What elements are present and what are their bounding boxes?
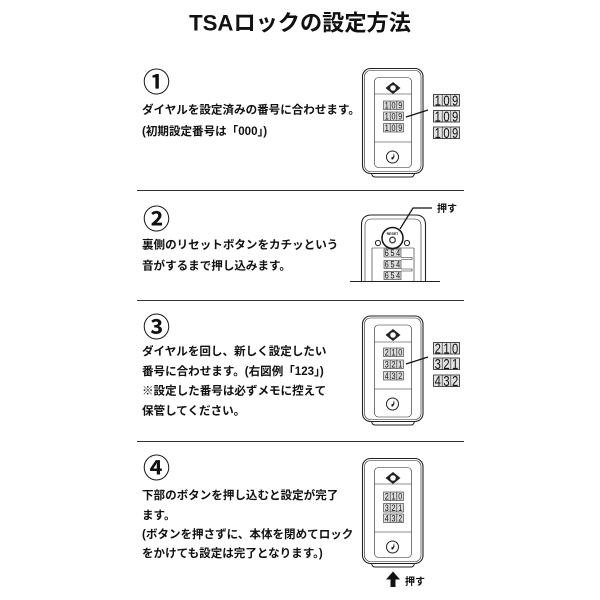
lock illustration 1: 109 [385,112,403,122]
lock illustration 3: 210 [385,348,403,358]
step number 4: ④ [143,454,170,484]
enlarged dials 3 [434,340,460,389]
lock illustration 3 [362,316,423,425]
divider lines [137,190,464,442]
step 3 text: ダイヤルを回し、新しく設定したい [142,344,326,358]
lock illustration 1: 109 [385,123,403,133]
step 4 text: 下部のボタンを押し込むと設定が完了 [142,488,338,502]
step 1 [142,68,460,177]
step 3 text: 番号に合わせます。(右図例「123」) [142,364,324,378]
lock illustration 3: 432 [385,371,403,381]
lock back illustration: 654 [385,260,401,270]
enlarged dials 1: 109 [435,108,458,125]
step 3 text: ※設定した番号は必ずメモに控えて [142,384,326,398]
step 4 [142,454,425,588]
step number 1: ① [143,68,170,98]
step 2 text: 裏側のリセットボタンをカチッという [142,238,338,252]
lock back illustration: RESET [387,232,399,236]
lock illustration 3: 321 [385,360,403,370]
arrow: push up [386,572,400,587]
step 2 text: 音がするまで押し込みます。 [142,258,291,272]
lock illustration 4: 210 [385,492,403,502]
enlarged dials 3: 210 [435,340,458,357]
lock back illustration: 654 [385,248,401,258]
step 4 text: をかけても設定は完了となります。) [142,546,323,560]
step 3 [142,313,460,425]
leader line 3 [406,357,428,364]
lock illustration 1: 109 [385,101,403,111]
title: TSAロックの設定方法 [189,10,411,36]
lock illustration 4: 432 [385,514,403,524]
enlarged dials 1: 109 [435,92,458,109]
step 4 text: ます。 [142,509,176,522]
lock illustration 4: 321 [385,503,403,513]
step 1 text: ダイヤルを設定済みの番号に合わせます。 [142,102,360,116]
step number 3: ③ [143,313,170,343]
leader line 1 [406,110,428,117]
enlarged dials 3: 432 [435,372,458,389]
lock illustration 1 [362,68,423,177]
step number 2: ② [143,205,170,235]
push label: 押す [437,202,457,215]
lock illustration 4 [362,458,423,567]
push label: 押す [405,575,425,588]
enlarged dials 1: 109 [435,124,458,141]
step 2 [142,202,457,282]
enlarged dials 1 [434,92,460,141]
step 3 text: 保管してください。 [142,404,245,418]
lock back illustration: 654 [385,271,401,281]
lock back illustration [350,215,440,282]
enlarged dials 3: 321 [435,355,458,372]
leader line 2 [400,208,432,229]
step 4 text: (ボタンを押さずに、本体を閉めてロック [142,527,353,541]
step 1 text: (初期設定番号は「000」) [142,124,267,138]
